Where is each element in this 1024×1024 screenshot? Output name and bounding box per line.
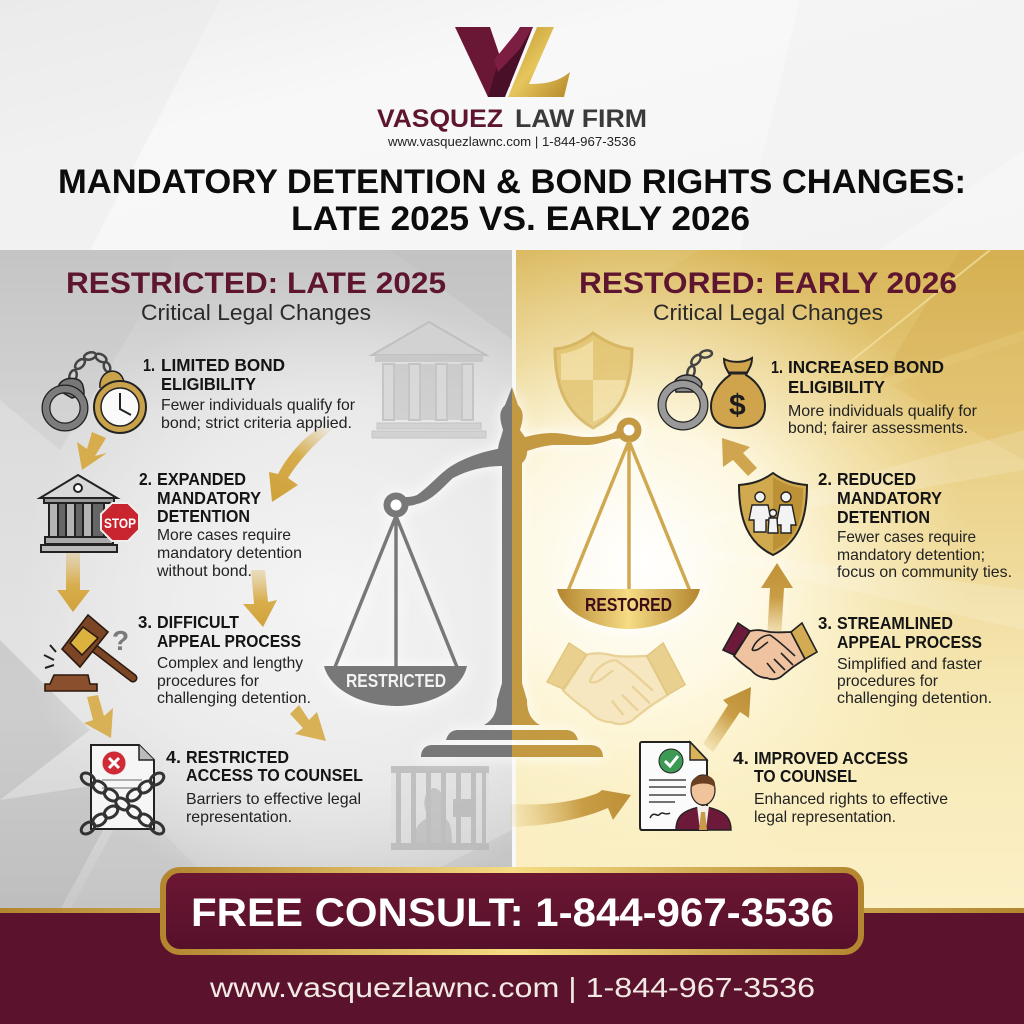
call to action text: FREE CONSULT: 1-844-967-3536 — [191, 891, 834, 935]
item 2 text: MANDATORY — [837, 488, 942, 508]
right panel background — [516, 250, 1024, 910]
arrow: courthouse to detention — [269, 428, 334, 502]
item 2 text: mandatory detention; — [837, 547, 985, 564]
item 4 text: legal representation. — [754, 809, 896, 826]
arrow: item 1 to item 2 — [77, 432, 107, 470]
item 3 text: procedures for — [157, 673, 260, 690]
item 4 text: IMPROVED ACCESS — [754, 748, 908, 768]
arrow: counsel to streamlined appeal — [703, 687, 751, 752]
item 3 text: 3. — [818, 613, 832, 633]
item 1 text: More individuals qualify for — [788, 403, 978, 420]
footer band — [0, 908, 1024, 1024]
scale: restored arm — [522, 426, 625, 453]
item 1 text: ELIGIBILITY — [788, 377, 885, 397]
item 1 text: ELIGIBILITY — [161, 374, 256, 394]
item 4 text — [166, 747, 363, 826]
firm name: LAW FIRM — [515, 105, 647, 133]
item 2 text — [139, 469, 302, 580]
item 3 text: procedures for — [837, 673, 939, 690]
left flow arrows — [57, 428, 334, 741]
scale: restored pan — [557, 589, 700, 629]
title: MANDATORY DETENTION & BOND RIGHTS CHANGES: — [58, 163, 966, 201]
header background — [0, 0, 1024, 250]
item 2 text: EXPANDED — [157, 469, 246, 489]
icon: gavel with question mark: ? — [112, 625, 129, 656]
arrow: item 3 to item 4 — [84, 695, 113, 738]
item 3 text: 3. — [138, 612, 152, 632]
item 3 text: APPEAL PROCESS — [837, 632, 982, 652]
item 3 text: APPEAL PROCESS — [157, 631, 301, 651]
scale: restricted label: RESTRICTED — [346, 671, 446, 691]
ghost icon: jail cell — [391, 766, 489, 850]
scale: restored label: RESTORED — [585, 595, 672, 615]
arrow: handshake to shield — [761, 563, 793, 640]
arrow: jail to counsel — [510, 790, 631, 827]
central scale — [324, 387, 700, 757]
item 3 text: STREAMLINED — [837, 613, 953, 633]
scale: gold half — [512, 387, 700, 757]
item 3 text: DIFFICULT — [157, 612, 239, 632]
item 1 text: Fewer individuals qualify for — [161, 397, 356, 414]
icon: handcuff and money bag — [662, 350, 765, 428]
item 3 text: Simplified and faster — [837, 656, 983, 673]
item 2 text: mandatory detention — [157, 545, 302, 562]
item 2 text: 2. — [818, 469, 832, 489]
subheading: restricted: Critical Legal Changes — [141, 300, 371, 325]
item 2 text: Fewer cases require — [837, 529, 976, 546]
item 1 text: bond; fairer assessments. — [788, 420, 968, 437]
heading: restricted: RESTRICTED: LATE 2025 — [66, 267, 446, 300]
icon: family shield — [739, 473, 807, 555]
item 2 text: REDUCED — [837, 469, 916, 489]
scale: restricted ring — [387, 496, 405, 514]
icon: chained document — [79, 745, 166, 836]
call to action box — [163, 870, 861, 952]
arrow: appeal to jail — [290, 705, 326, 741]
item 2 text: MANDATORY — [157, 488, 261, 508]
scale: restored ring — [620, 421, 638, 439]
item 4 text: ACCESS TO COUNSEL — [186, 765, 363, 785]
item 3 text — [138, 612, 311, 707]
arrow: detention to appeal — [243, 570, 277, 627]
item 4 text: TO COUNSEL — [754, 766, 857, 786]
item 2 text: 2. — [139, 469, 152, 489]
scale: restricted strings — [335, 516, 457, 667]
item 1 text: bond; strict criteria applied. — [161, 415, 352, 432]
icon: document with attorney — [640, 742, 731, 830]
ghost icon: courthouse — [372, 322, 486, 438]
scale: restricted arm — [403, 448, 502, 506]
left panel background — [0, 250, 512, 910]
footer contact: www.vasquezlawnc.com | 1-844-967-3536 — [209, 972, 815, 1003]
item 4 text: 4. — [166, 747, 181, 767]
item 4 text: Enhanced rights to effective — [754, 791, 948, 808]
item 4 text: 4. — [733, 748, 749, 768]
item 1 text: INCREASED BOND — [788, 357, 944, 377]
logo mark: V — [455, 27, 533, 97]
firm name: VASQUEZ — [377, 105, 503, 133]
item 4 text: RESTRICTED — [186, 747, 289, 767]
logo — [377, 27, 647, 149]
panel divider — [512, 250, 516, 910]
scale: restricted pan — [324, 666, 467, 706]
title — [58, 163, 966, 238]
ghost icon: handshake — [547, 643, 685, 724]
arrow: shield to bond — [722, 438, 757, 476]
item 3 text: challenging detention. — [157, 690, 311, 707]
item 4 text: Barriers to effective legal — [186, 791, 361, 808]
heading: restored: RESTORED: EARLY 2026 — [579, 267, 957, 300]
item 4 text — [733, 748, 948, 826]
title: LATE 2025 VS. EARLY 2026 — [291, 200, 750, 238]
logo mark: L — [508, 27, 570, 97]
item 2 text — [818, 469, 1012, 581]
item 1 text — [143, 355, 356, 432]
panel: restricted — [40, 267, 446, 836]
icon: gavel with question mark — [44, 615, 133, 691]
panel: restored — [579, 267, 1012, 830]
firm contact: www.vasquezlawnc.com | 1-844-967-3536 — [387, 135, 636, 149]
scale: restored strings — [568, 441, 690, 591]
item 2 text: DETENTION — [157, 506, 250, 526]
item 2 text: More cases require — [157, 527, 291, 544]
item 2 text: DETENTION — [837, 507, 930, 527]
icon: courthouse with stop sign: STOP — [104, 515, 136, 531]
item 1 text: 1. — [143, 355, 155, 375]
item 3 text: Complex and lengthy — [157, 655, 303, 672]
firm name — [377, 105, 647, 133]
item 2 text: focus on community ties. — [837, 564, 1012, 581]
right flow arrows — [510, 438, 793, 827]
icon: handcuff and clock — [46, 351, 146, 433]
item 3 text — [818, 613, 992, 707]
item 1 text — [771, 357, 978, 437]
icon: handshake — [723, 623, 817, 679]
arrow: item 2 to item 3 — [57, 553, 90, 612]
item 2 text: without bond. — [156, 563, 252, 580]
ghost icon: shield — [555, 333, 632, 428]
icon: handcuff and money bag: $ — [729, 389, 746, 422]
icon: courthouse with stop sign — [40, 475, 139, 552]
subheading: restored: Critical Legal Changes — [653, 300, 883, 325]
item 1 text: 1. — [771, 357, 783, 377]
item 3 text: challenging detention. — [837, 690, 992, 707]
item 1 text: LIMITED BOND — [161, 355, 285, 375]
item 4 text: representation. — [186, 809, 292, 826]
scale: gray half — [324, 387, 512, 757]
